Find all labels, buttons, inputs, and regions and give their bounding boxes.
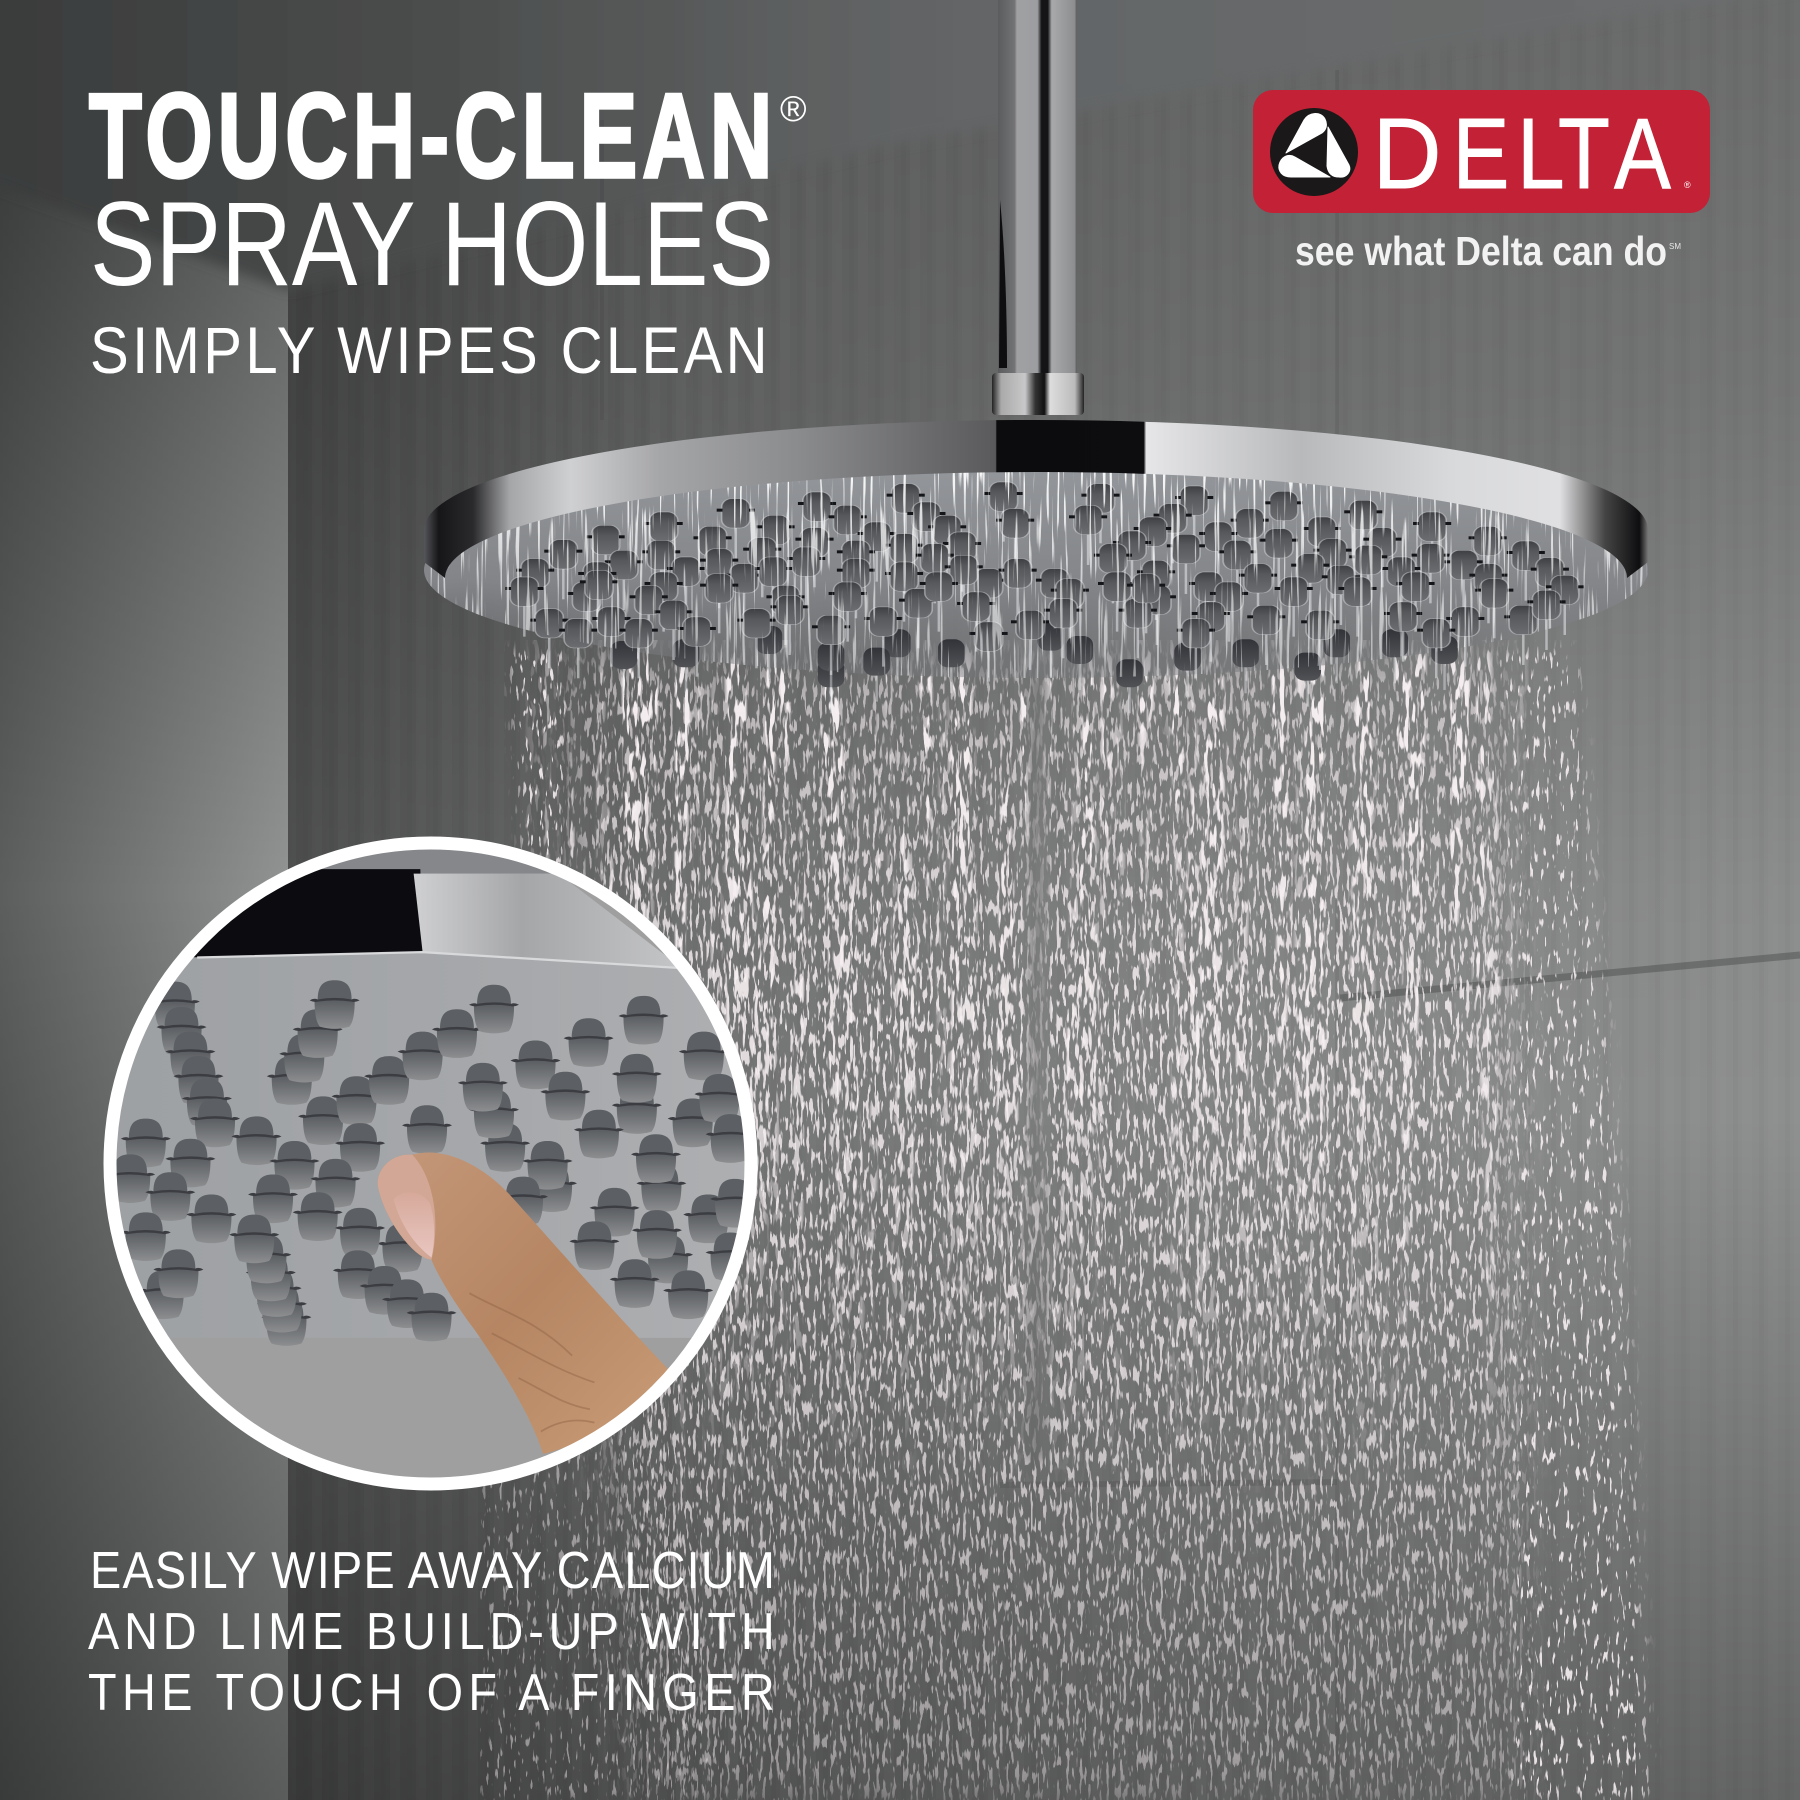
spray plate (424, 462, 1648, 678)
wordmark: D (1373, 98, 1441, 210)
caption line 1: EASILY WIPE AWAY CALCIUM (90, 1542, 775, 1600)
wordmark: ELTA (1453, 97, 1671, 210)
shower arm pipe (998, 0, 1077, 375)
shower head (420, 420, 1660, 713)
pipe collar (992, 373, 1084, 415)
inset photo contents (116, 850, 744, 1478)
chrome rim band (424, 420, 1648, 578)
nozzles on spray plate (505, 482, 1584, 713)
red badge (1253, 90, 1710, 213)
wordmark registered mark: ® (1684, 180, 1691, 190)
subheading: SIMPLY WIPES CLEAN (90, 315, 768, 388)
registered mark: ® (780, 88, 807, 129)
caption (88, 1542, 775, 1722)
water spray falling from shower head (480, 640, 1680, 1800)
service mark: SM (1669, 242, 1681, 251)
finger (378, 1153, 668, 1454)
inset circle: finger wiping nozzles (104, 836, 758, 1490)
tagline: see what Delta can do (1295, 228, 1667, 274)
icon: delta triangle mark (1270, 108, 1358, 196)
logo: Delta (1253, 90, 1710, 274)
fine water jets across plate (426, 472, 1648, 678)
caption line 2: AND LIME BUILD-UP WITH (88, 1603, 775, 1661)
caption line 3: THE TOUCH OF A FINGER (88, 1664, 775, 1722)
inset white ring (110, 843, 751, 1484)
inset nozzles (105, 980, 760, 1346)
heading: Spray Holes: SPRAY HOLES (90, 177, 774, 311)
title: Touch-Clean: TOUCH-CLEAN (89, 69, 772, 203)
